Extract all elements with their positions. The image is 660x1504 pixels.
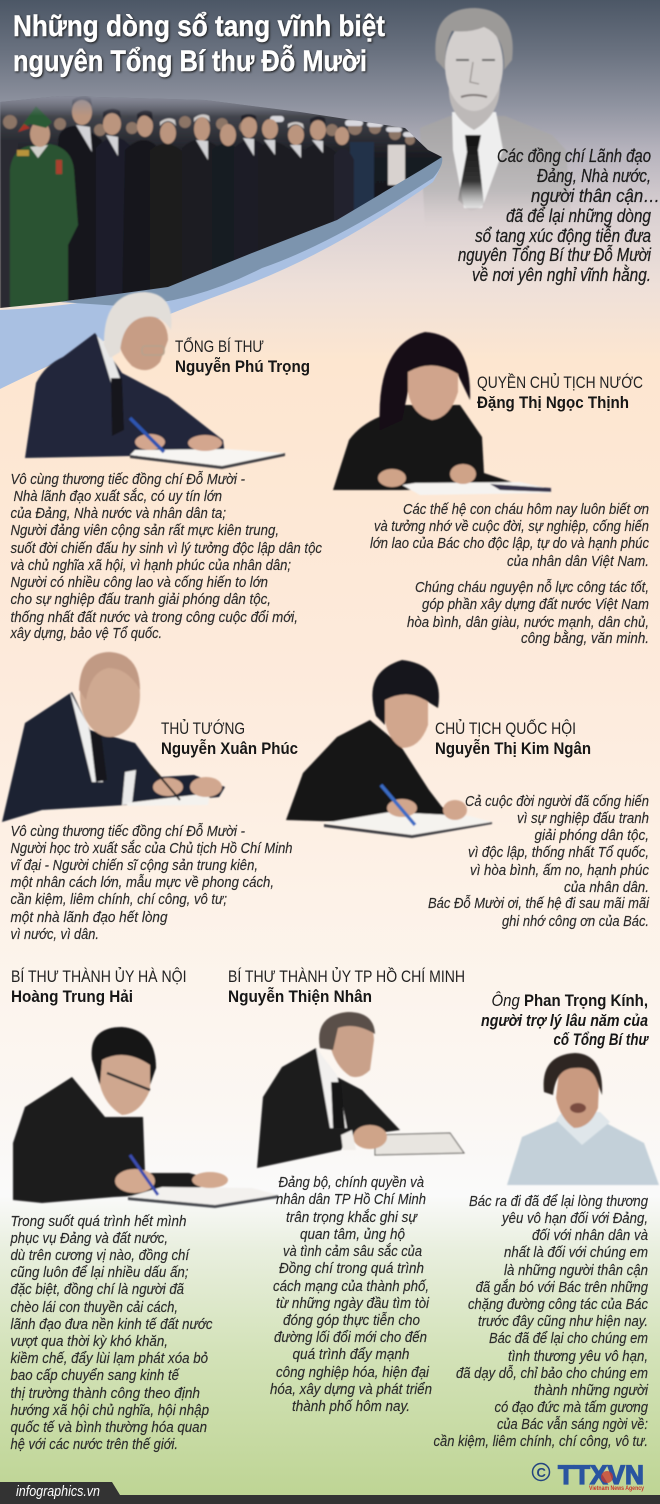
- tribute text: trân trọng khắc ghi sự: [286, 1209, 418, 1226]
- tribute text: thành phố hôm nay.: [292, 1398, 410, 1415]
- tribute text: đối với nhân dân và: [532, 1227, 648, 1244]
- tribute text: Người có nhiều công lao và cống hiến to lớn: [10, 574, 268, 591]
- tribute text: suốt đời chiến đấu hy sinh vì lý tưởng độc lập dân tộc: [10, 540, 322, 557]
- tribute text: thống nhất đất nước và trong công cuộc đổi mới,: [10, 609, 298, 626]
- tribute text: hướng xã hội chủ nghĩa, hội nhập: [10, 1402, 209, 1419]
- role and name: Nguyễn Phú Trọng: [175, 357, 310, 376]
- tribute text: Nhà lãnh đạo xuất sắc, có uy tín lớn: [14, 488, 222, 505]
- tribute text: cách mạng của thành phố,: [273, 1278, 429, 1295]
- role and name: TỔNG BÍ THƯ: [175, 337, 264, 356]
- panel: Nguyễn Thiện Nhân: [228, 967, 465, 1415]
- photo: mourners at the funeral: [0, 92, 445, 312]
- tribute text: của nhân dân.: [564, 879, 649, 896]
- tribute text: quá trình đẩy mạnh: [292, 1346, 410, 1363]
- tribute text: vì nước, vì dân.: [10, 926, 99, 943]
- role and name: CHỦ TỊCH QUỐC HỘI: [435, 718, 576, 738]
- tribute text: xây dựng, bảo vệ Tổ quốc.: [10, 625, 162, 642]
- panel: Hoàng Trung Hải: [10, 967, 278, 1453]
- title: Những dòng sổ tang vĩnh biệt: [13, 10, 385, 43]
- tribute text: kiềm chế, đẩy lùi lạm phát xóa bỏ: [10, 1350, 208, 1367]
- logo: TTXVN: TTXVN: [558, 1460, 644, 1490]
- tribute text: đặc biệt, đồng chí là người đã: [10, 1281, 185, 1298]
- tribute text: lãnh đạo đưa nền kinh tế đất nước: [10, 1316, 213, 1333]
- role and name: [477, 373, 643, 412]
- role and name: [435, 718, 591, 758]
- tribute text: một nhân cách lớn, mẫu mực về phong cách,: [10, 874, 274, 891]
- panel: Nguyễn Thị Kim Ngân: [286, 660, 650, 930]
- role and name: Nguyễn Xuân Phúc: [161, 739, 298, 758]
- role and name: [11, 967, 186, 1006]
- photo: Đặng Thị Ngọc Thịnh signing: [333, 332, 551, 495]
- tribute text: từ những ngày đầu tìm tòi: [276, 1295, 430, 1312]
- tribute text: cũng luôn để lại nhiều dấu ấn;: [10, 1264, 188, 1281]
- tribute text: Người đảng viên cộng sản rất mực kiên trung,: [10, 522, 279, 539]
- panel: Đặng Thị Ngọc Thịnh: [333, 332, 649, 647]
- role and name: BÍ THƯ THÀNH ỦY HÀ NỘI: [11, 967, 186, 986]
- tribute text: Đồng chí trong quá trình: [279, 1260, 424, 1277]
- tribute text: bao cấp chuyển sang kinh tế: [10, 1367, 180, 1384]
- tribute text: Trong suốt quá trình hết mình: [10, 1213, 186, 1230]
- panel: Phan Trọng Kính: [434, 991, 659, 1450]
- tribute text: vĩ đại - Người chiến sĩ cộng sản trung kiên,: [10, 857, 258, 874]
- title: nguyên Tổng Bí thư Đỗ Mười: [13, 44, 367, 78]
- tribute text: và chủ nghĩa xã hội, vì hạnh phúc của nhân dân;: [10, 557, 291, 574]
- tribute text: [270, 1174, 432, 1415]
- tribute text: và tình cảm sâu sắc của: [283, 1243, 422, 1260]
- photo: Nguyễn Thiện Nhân signing: [257, 1012, 464, 1168]
- logo: TTXVN: C: [536, 1465, 546, 1480]
- role and name: Đặng Thị Ngọc Thịnh: [477, 393, 629, 412]
- tribute text: đóng góp thực tiễn cho: [283, 1312, 420, 1329]
- footer bar: infographics.vn: [16, 1483, 100, 1500]
- tribute text: [10, 823, 292, 943]
- tribute text: thị trường thành công theo định: [10, 1385, 200, 1402]
- photo: Hoàng Trung Hải signing: [13, 1027, 278, 1208]
- tribute text: công nghiệp hóa, hiện đại: [276, 1364, 430, 1381]
- photo: Phan Trọng Kính: [507, 1053, 659, 1185]
- footer bar: [0, 1482, 660, 1504]
- tribute text: quốc tế và bình thường hóa quan: [10, 1419, 207, 1436]
- tribute text: cho sự nghiệp đấu tranh giải phóng dân tộc,: [10, 591, 271, 608]
- intro text: [458, 146, 660, 285]
- role and name: [228, 967, 465, 1006]
- tribute text: [10, 471, 322, 642]
- tribute text: Người học trò xuất sắc của Chủ tịch Hồ Chí Minh: [10, 840, 292, 857]
- role and name: Nguyễn Thiện Nhân: [228, 987, 372, 1006]
- portrait: Đỗ Mười: [420, 8, 572, 228]
- tribute text: một nhà lãnh đạo hết lòng: [10, 909, 168, 926]
- panel: Nguyễn Phú Trọng: [10, 292, 322, 642]
- tribute text: thành những người: [534, 1382, 649, 1399]
- tribute text: Đảng bộ, chính quyền và: [278, 1174, 424, 1191]
- tribute text: chèo lái con thuyền cải cách,: [10, 1299, 178, 1316]
- role and name: Nguyễn Thị Kim Ngân: [435, 739, 591, 758]
- tribute text: đường lối đổi mới cho đến: [274, 1329, 427, 1346]
- role and name: Hoàng Trung Hải: [11, 987, 133, 1006]
- tribute text: phục vụ Đảng và đất nước,: [10, 1230, 168, 1247]
- panel: Nguyễn Xuân Phúc: [2, 652, 298, 943]
- role and name: [175, 337, 310, 376]
- tribute text: dù trên cương vị nào, đồng chí: [10, 1247, 191, 1264]
- ribbon: blue curve: [0, 157, 442, 389]
- role and name: [161, 719, 298, 758]
- photo: Nguyễn Xuân Phúc signing: [2, 652, 225, 822]
- tribute text: [428, 793, 650, 930]
- tribute text: cần kiệm, liêm chính, chí công, vô tư;: [10, 891, 227, 908]
- tribute text: giải phóng dân tộc,: [534, 827, 649, 844]
- name and role: [481, 991, 649, 1049]
- tribute text: nhân dân TP Hồ Chí Minh: [276, 1191, 426, 1208]
- photo: Nguyễn Thị Kim Ngân signing: [286, 660, 492, 838]
- tribute text: Vô cùng thương tiếc đồng chí Đỗ Mười -: [10, 823, 245, 840]
- title: [13, 10, 385, 78]
- tribute text: hóa, xây dựng và phát triển: [270, 1381, 432, 1398]
- role and name: THỦ TƯỚNG: [161, 719, 245, 738]
- tribute text: của Đảng, Nhà nước và nhân dân ta;: [10, 505, 226, 522]
- tribute text: quan tâm, ủng hộ: [300, 1226, 405, 1243]
- tribute text: [370, 501, 649, 647]
- tribute text: vượt qua thời kỳ khó khăn,: [10, 1333, 168, 1350]
- tribute text: Vô cùng thương tiếc đồng chí Đỗ Mười -: [10, 471, 245, 488]
- logo: TTXVN: Vietnam News Agency: [589, 1486, 645, 1492]
- tribute text: [434, 1193, 649, 1450]
- tribute text: [10, 1213, 213, 1453]
- tribute text: hệ với các nước trên thế giới.: [10, 1436, 178, 1453]
- role and name: BÍ THƯ THÀNH ỦY TP HỒ CHÍ MINH: [228, 967, 465, 986]
- photo: Nguyễn Phú Trọng signing: [25, 292, 285, 469]
